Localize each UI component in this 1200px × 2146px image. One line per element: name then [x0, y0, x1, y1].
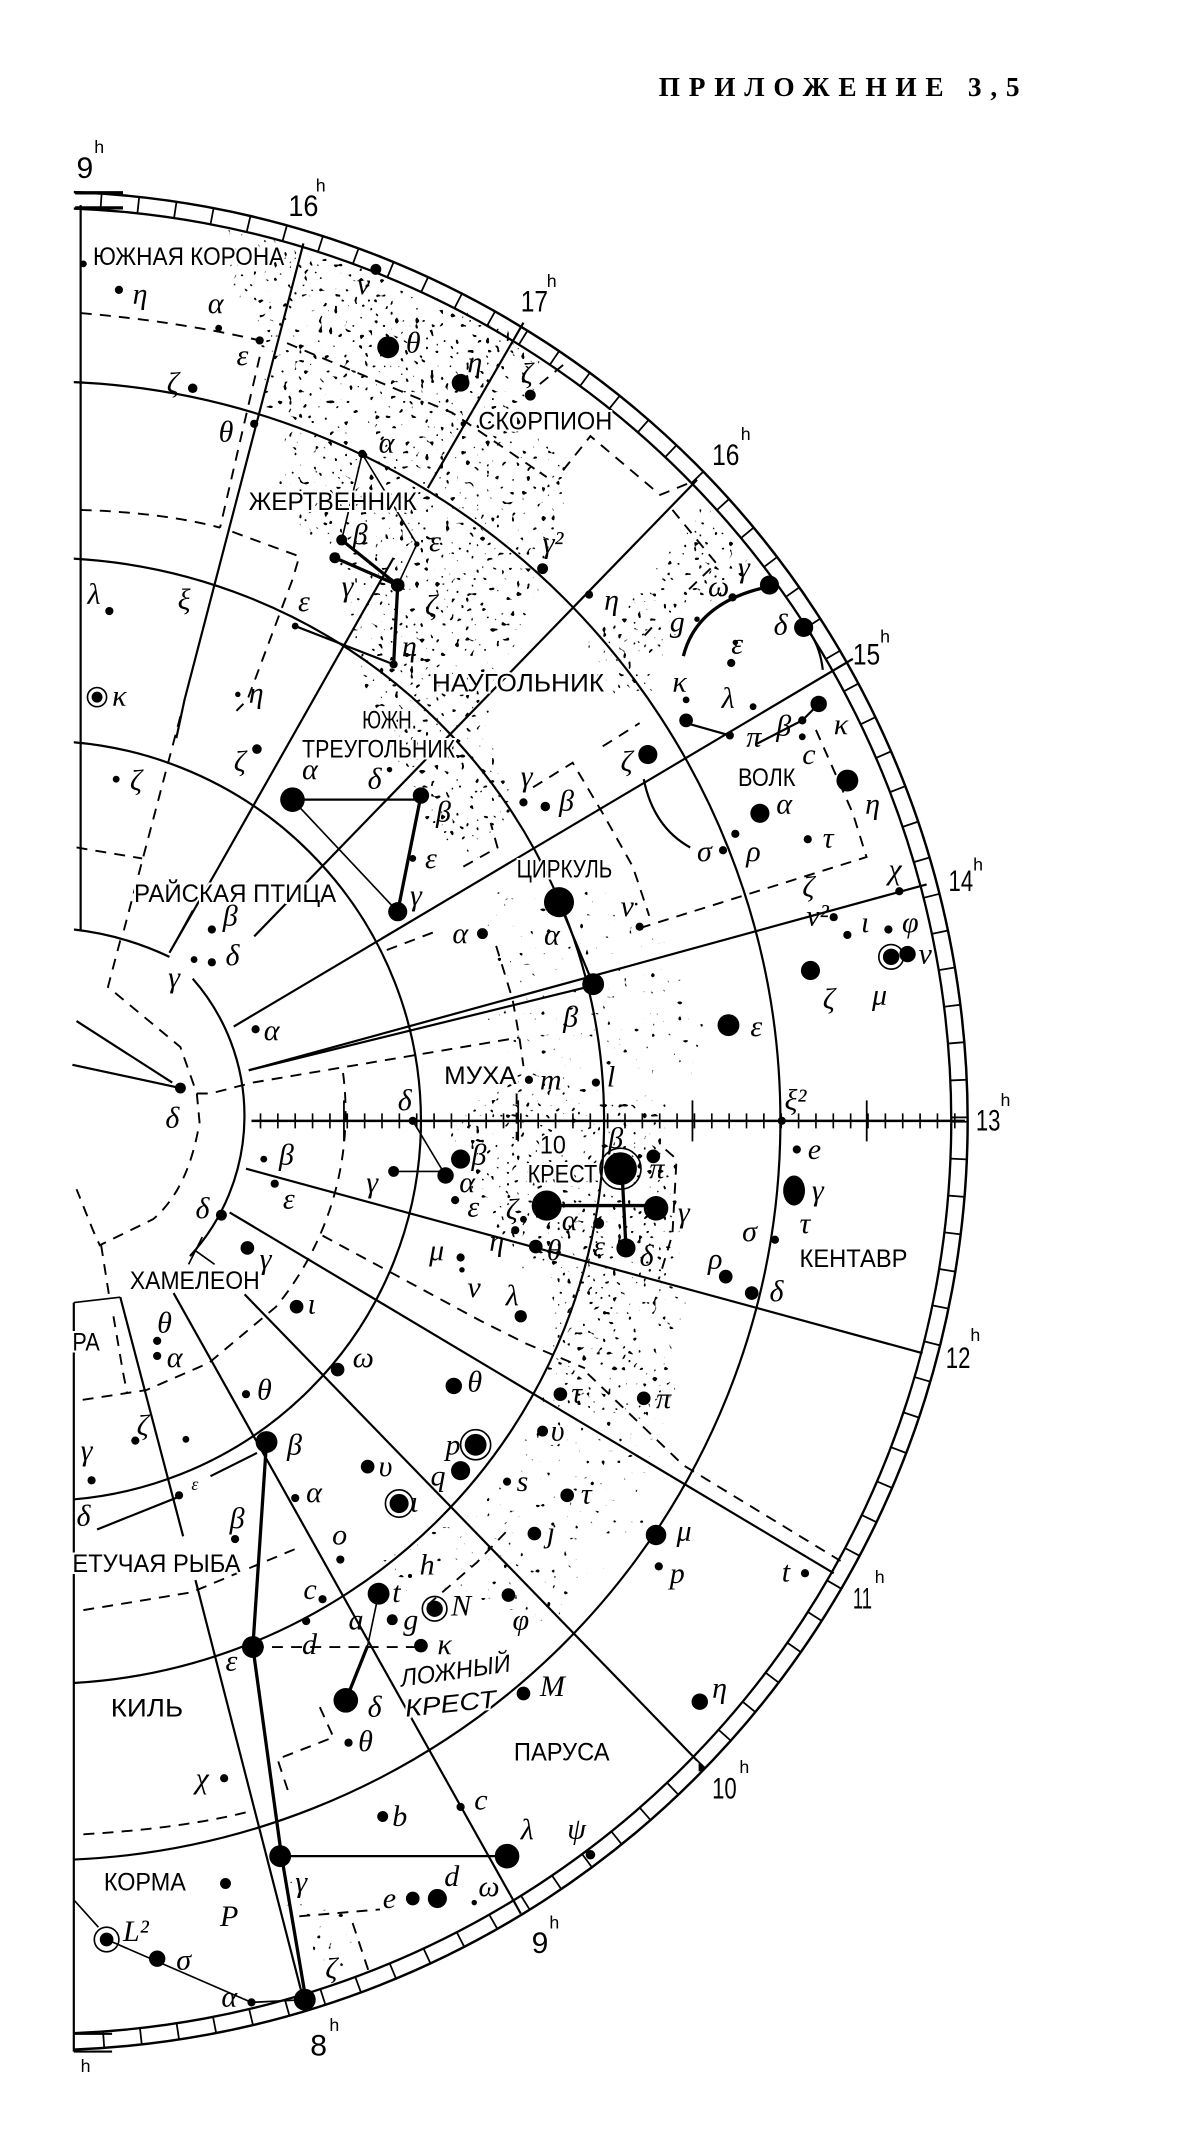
star designations: lower part: s	[517, 1464, 528, 1498]
star designations: middle part: η	[489, 1224, 504, 1258]
hour labels: h	[741, 424, 751, 444]
star designations: middle part: α	[167, 1340, 184, 1374]
star designations: lower part: p	[668, 1556, 685, 1590]
star designations: middle part: π	[649, 1151, 665, 1185]
star designations: lower part: ι	[410, 1485, 418, 1519]
star designations: upper part: δ	[165, 1101, 180, 1135]
star designations: upper part: ε	[731, 626, 743, 660]
hour labels: 9	[532, 1927, 548, 1960]
star designations: upper part: ω	[708, 569, 729, 603]
star designations: lower part: κ	[437, 1627, 452, 1661]
star designations: upper part: α	[776, 786, 793, 820]
constellation names: РАЙСКАЯ ПТИЦА	[134, 880, 337, 908]
star designations: upper part: ε	[750, 1009, 762, 1043]
star designations: upper part: m	[540, 1062, 562, 1096]
star designations: lower part: ε	[226, 1643, 238, 1677]
constellation figures	[97, 454, 823, 2002]
constellation names: КЕНТАВР	[800, 1246, 908, 1273]
star designations: upper part: η	[249, 676, 264, 710]
hour labels: 15	[853, 638, 880, 671]
star designations: lower part: δ	[77, 1498, 92, 1532]
hour labels: h	[549, 1913, 559, 1933]
star designations: upper part: ζ	[823, 982, 837, 1016]
star designations: upper part: β	[222, 898, 238, 932]
star designations: upper part: μ	[871, 978, 887, 1012]
constellation names: РА	[72, 1329, 100, 1356]
constellation names: ВОЛК	[738, 765, 796, 792]
star designations: middle part: θ	[467, 1364, 482, 1398]
star designations: upper part: l	[607, 1060, 615, 1094]
star designations: lower part: L²	[122, 1914, 150, 1948]
hour labels: h	[94, 137, 104, 157]
hour labels: 12	[946, 1342, 970, 1375]
constellation names: 10	[540, 1133, 566, 1160]
hour labels: 8	[310, 2030, 327, 2063]
star designations: lower part: γ	[81, 1433, 94, 1467]
star designations: lower part: q	[431, 1459, 446, 1493]
star designations: middle part: γ	[260, 1241, 273, 1275]
star designations: upper part: δ	[398, 1083, 413, 1117]
star designations: upper part: γ²	[543, 525, 564, 559]
star designations: upper part: η	[133, 277, 147, 311]
star designations: upper part: α	[452, 916, 469, 950]
star designations: lower part: a	[349, 1602, 364, 1636]
star designations: upper part: ζ	[234, 744, 248, 778]
star designations: upper part: κ	[672, 665, 687, 699]
map frame	[74, 193, 123, 2052]
star designations: middle part: ρ	[707, 1241, 722, 1275]
star designations: upper part: α	[544, 918, 561, 952]
star designations: lower part: γ	[295, 1865, 308, 1899]
axis 13h with ticks	[251, 1120, 965, 1122]
star designations: upper part: ι	[861, 905, 869, 939]
milky way stippling	[178, 205, 779, 2002]
title: ПРИЛОЖЕНИЕ 3,5	[659, 72, 1020, 102]
star designations: upper part: α	[208, 286, 225, 320]
star designations: upper part: ζ	[130, 763, 144, 797]
star designations: middle part: ι	[308, 1287, 316, 1321]
star designations: lower part: τ	[581, 1477, 593, 1511]
star designations: upper part: ρ	[745, 834, 761, 868]
star designations: lower part: α	[221, 1979, 238, 2013]
constellation names: МУХА	[444, 1063, 517, 1090]
star designations: middle part: λ	[505, 1278, 519, 1312]
star designations: upper part: π	[746, 719, 762, 753]
star designations: lower part: t	[782, 1554, 791, 1588]
star designations: upper part: η	[865, 786, 880, 820]
star designations: lower part: ω	[478, 1869, 500, 1903]
constellation names: СКОРПИОН	[478, 408, 612, 435]
star designations: lower part: d	[444, 1859, 460, 1893]
star designations: upper part: δ	[774, 607, 789, 641]
constellation names: КОРМА	[104, 1869, 186, 1896]
star designations: lower part: o	[332, 1518, 347, 1552]
star designations: lower part: p	[444, 1427, 461, 1461]
star designations: upper part: γ	[342, 569, 355, 603]
star designations: upper part: δ	[368, 762, 383, 796]
star designations: lower part: M	[539, 1669, 567, 1703]
hour labels: h	[81, 2056, 91, 2076]
constellation names: ТРЕУГОЛЬНИК	[302, 736, 456, 763]
hour labels: 10	[712, 1773, 737, 1806]
star designations: upper part: φ	[902, 905, 919, 939]
star designations: lower part: d	[302, 1627, 318, 1661]
outer graduated ring	[0, 191, 968, 2050]
star designations: lower part: δ	[368, 1690, 383, 1724]
star designations: upper part: κ	[834, 707, 849, 741]
star designations: middle part: τ	[571, 1375, 583, 1409]
star designations: middle part: ε	[593, 1229, 605, 1263]
star designations: lower part: υ	[551, 1414, 565, 1448]
star designations: upper part: ζ	[425, 588, 439, 622]
star designations: upper part: λ	[86, 577, 100, 611]
star designations: middle part: ν	[467, 1270, 481, 1304]
star designations: lower part: χ	[192, 1761, 209, 1795]
star designations: middle part: π	[656, 1381, 672, 1415]
star designations: upper part: κ	[112, 678, 127, 712]
hour lines	[72, 243, 927, 2000]
star designations: upper part: η	[467, 345, 482, 379]
constellation names: ЛОЖНЫЙ	[397, 1649, 513, 1693]
constellation names: ПАРУСА	[514, 1739, 610, 1766]
constellation names: ЕТУЧАЯ РЫБА	[72, 1551, 241, 1578]
constellation names	[72, 244, 908, 1896]
star designations: middle part: δ	[195, 1191, 210, 1225]
star designations: middle part: e	[808, 1132, 821, 1166]
constellation names: КИЛЬ	[111, 1696, 183, 1723]
hour labels: 16	[288, 190, 318, 223]
star designations: lower part: h	[420, 1548, 435, 1582]
star designations: upper part: β	[435, 795, 451, 829]
star designations: lower part: β	[229, 1501, 245, 1535]
star designations: lower part: ψ	[567, 1811, 587, 1845]
star designations: middle part: σ	[742, 1214, 758, 1248]
star designations: upper part: ε	[298, 584, 310, 618]
hour labels: 17	[521, 286, 548, 319]
star designations: middle part: τ	[800, 1206, 812, 1240]
star designations: upper part: θ	[406, 326, 421, 360]
hour labels: h	[880, 626, 890, 646]
hour labels: h	[1000, 1090, 1010, 1110]
star designations: lower part: φ	[513, 1602, 529, 1636]
star designations: lower part: ζ	[137, 1408, 151, 1442]
hour labels: 11	[853, 1583, 872, 1616]
star designations: upper part: ζ	[802, 870, 816, 904]
star designations: upper part: δ	[226, 938, 241, 972]
hour labels: h	[739, 1757, 749, 1777]
star designations: lower part: c	[474, 1783, 488, 1817]
star designations: upper part: ε	[425, 841, 437, 875]
star designations: lower part: θ	[358, 1724, 373, 1758]
hour labels: h	[329, 2015, 339, 2035]
star designations: middle part: ζ	[506, 1192, 520, 1226]
star designations: lower part: e	[383, 1881, 396, 1915]
star designations: middle part: θ	[157, 1306, 172, 1340]
star designations: upper part: ζ	[167, 365, 181, 399]
constellation names: ЖЕРТВЕННИК	[249, 489, 418, 516]
star designations: upper part: η	[604, 583, 619, 617]
star designations: middle part: α	[459, 1165, 476, 1199]
star designations: middle part: δ	[769, 1274, 784, 1308]
star designations: lower part: g	[403, 1602, 418, 1636]
star designations: upper part: θ	[219, 415, 234, 449]
star designations: lower part: N	[450, 1589, 473, 1623]
star designations: middle part: θ	[257, 1373, 272, 1407]
star designations: upper part: ε	[236, 338, 248, 372]
star designations: lower part: υ	[379, 1449, 392, 1483]
hour labels	[77, 137, 1010, 2076]
star designations: upper part: η	[402, 629, 417, 663]
star designations: lower part: c	[303, 1572, 317, 1606]
star designations: middle part: α	[562, 1203, 579, 1237]
coordinate grid: declination circles	[0, 381, 780, 1860]
star designations: upper part: α	[264, 1013, 281, 1047]
star designations: upper part: γ	[168, 960, 181, 994]
hour labels: 9	[77, 152, 93, 185]
star designations: lower part: μ	[676, 1513, 692, 1547]
star designations: upper part: c	[802, 737, 816, 771]
star designations: middle part: θ	[547, 1233, 562, 1267]
constellation names: ЦИРКУЛЬ	[517, 857, 612, 884]
hour labels: h	[547, 271, 557, 291]
star designations: lower part: β	[286, 1427, 302, 1461]
star designations: upper part: β	[558, 784, 574, 818]
star designations: lower part: ζ	[325, 1951, 339, 1985]
hour labels: 14	[949, 865, 973, 898]
star designations: upper part: β	[775, 708, 791, 742]
star designations: upper part: χ	[885, 852, 902, 886]
star designations: middle part: ω	[353, 1340, 374, 1374]
star designations: upper part: ν²	[806, 898, 830, 932]
star designations: middle part	[157, 1121, 825, 1415]
star designations: middle part: β	[607, 1121, 623, 1155]
star designations: lower part: t	[392, 1575, 401, 1609]
star designations: upper part: γ	[521, 759, 534, 793]
star designations: lower part: α	[306, 1475, 323, 1509]
star designations: upper part: ν	[918, 937, 932, 971]
hour labels: h	[970, 1325, 980, 1345]
star designations: upper part: σ	[697, 834, 713, 868]
constellation names: НАУГОЛЬНИК	[432, 671, 605, 698]
star designations: upper part: β	[562, 1000, 578, 1034]
star designations: upper part: ξ	[178, 583, 191, 617]
star designations: middle part: δ	[640, 1239, 655, 1273]
star designations: upper part: τ	[823, 820, 835, 854]
star designations: lower part: P	[219, 1899, 238, 1933]
constellation names: КРЕСТ	[528, 1161, 597, 1188]
star designations: middle part: γ	[678, 1195, 691, 1229]
star designations: lower part: λ	[520, 1813, 534, 1847]
star designations: upper part: β	[352, 517, 368, 551]
star designations: upper part: ξ²	[785, 1083, 807, 1117]
star designations: upper part: ε	[429, 524, 441, 558]
constellation boundaries (dashed)	[75, 313, 867, 1976]
stars	[80, 260, 916, 2011]
star designations: middle part: β	[278, 1138, 294, 1172]
hour labels: h	[875, 1567, 885, 1587]
star designations: upper part: λ	[721, 681, 735, 715]
constellation names: ЮЖНАЯ КОРОНА	[93, 244, 285, 271]
star designations: lower part: ε	[191, 1474, 198, 1494]
star designations: lower part: η	[712, 1671, 727, 1705]
constellation names: ХАМЕЛЕОН	[130, 1268, 260, 1295]
star designations: upper part: g	[670, 605, 685, 639]
constellation names: ЮЖН.	[362, 708, 417, 735]
star designations: upper part	[86, 267, 932, 1135]
hour labels: 16	[712, 439, 739, 472]
star designations: middle part: ε	[283, 1181, 295, 1215]
star designations: upper part: ζ	[621, 744, 635, 778]
star designations: lower part: j	[543, 1515, 555, 1549]
star designations: upper part: α	[379, 425, 396, 459]
star designations: middle part: ε	[467, 1190, 479, 1224]
hour labels: h	[973, 855, 983, 875]
constellation names: КРЕСТ	[404, 1686, 500, 1723]
star designations: lower part: σ	[176, 1943, 192, 1977]
star designations: upper part: γ	[410, 878, 423, 912]
star designations: lower part: b	[392, 1799, 407, 1833]
star designations: middle part: γ	[366, 1165, 379, 1199]
star designations: lower part	[77, 1408, 791, 2013]
star designations: upper part: γ	[738, 550, 751, 584]
star designations: middle part: β	[471, 1138, 487, 1172]
star designations: upper part: α	[302, 752, 319, 786]
star designations: middle part: γ	[812, 1173, 825, 1207]
hour labels: 13	[976, 1104, 1000, 1137]
star designations: middle part: μ	[428, 1233, 444, 1267]
star designations: upper part: ν	[357, 267, 371, 301]
star designations: upper part: ν	[621, 889, 635, 923]
star designations: upper part: ζ	[521, 356, 535, 390]
hour labels: h	[316, 175, 326, 195]
